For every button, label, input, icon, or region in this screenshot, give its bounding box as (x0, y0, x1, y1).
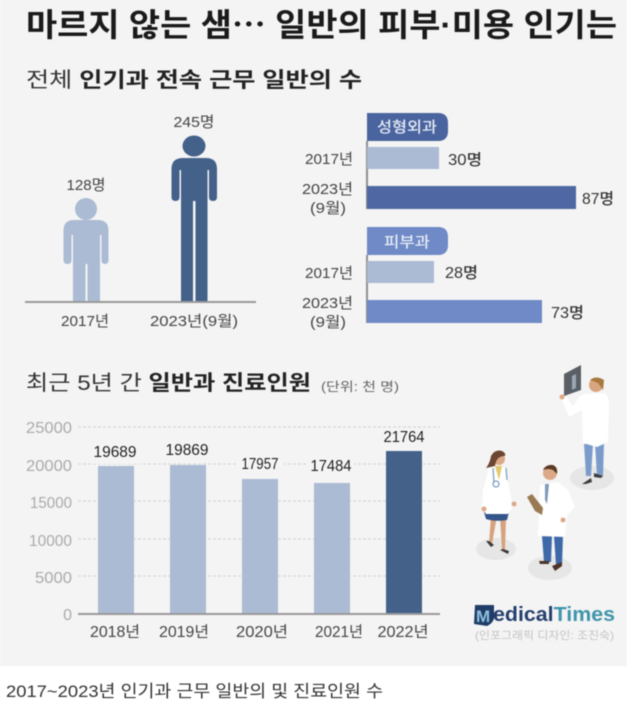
x axis labels: 2018년 (90, 623, 140, 641)
heading: recent five years: 최근 5년 간 일반과 진료인원 (26, 372, 311, 395)
label: September: (9월) (310, 200, 346, 217)
x axis labels: 2020년 (236, 623, 288, 641)
label: 245: 245명 (174, 114, 214, 131)
value: 73: 73명 (551, 304, 584, 322)
male doctor (527, 465, 575, 580)
x axis labels (90, 623, 428, 641)
value labels: 19689 (94, 444, 136, 461)
y axis labels: 15000 (30, 495, 72, 512)
bar: 2023 (367, 186, 576, 209)
label: year 2017: 2017년 (305, 151, 353, 168)
x axis labels: 2022년 (378, 623, 428, 641)
label: 2023: 2023년(9월) (150, 313, 238, 330)
y axis labels (26, 420, 72, 624)
tag: plastic surgery: 성형외과 (377, 119, 437, 136)
y axis labels: 0 (63, 607, 72, 624)
logo: Medical Times: M (476, 607, 490, 626)
label: 2017: 2017년 (61, 313, 109, 330)
y axis labels: 25000 (26, 420, 72, 437)
baseline (25, 301, 256, 303)
value labels: 17484 (310, 458, 352, 475)
bar: 2017 (367, 261, 434, 283)
title: 마르지 않는 샘⋯ 일반의 피부·미용 인기는 (26, 7, 617, 43)
heading: total doctors: 전체 인기과 전속 근무 일반의 수 (26, 69, 362, 92)
credit: (인포그래픽 디자인: 조진숙) (475, 629, 614, 642)
caption: 2017~2023년 인기과 근무 일반의 및 진료인원 수 (6, 682, 383, 701)
y axis labels: 20000 (26, 458, 72, 475)
label: 128: 128명 (66, 177, 106, 194)
value labels: 19869 (166, 442, 208, 459)
female doctor (476, 451, 516, 560)
y axis labels: 10000 (29, 533, 72, 550)
bars (98, 451, 422, 614)
illustration: doctors (476, 365, 614, 580)
axis line (78, 613, 440, 615)
icon: person 2017 (64, 198, 108, 302)
x axis labels: 2019년 (159, 623, 209, 641)
panel: dermatology bars (302, 227, 584, 331)
value: 30: 30명 (448, 151, 482, 169)
tag: dermatology: 피부과 (384, 234, 430, 251)
y axis labels: 5000 (35, 570, 72, 587)
value labels: 17957 (242, 456, 278, 473)
value: 87: 87명 (582, 190, 614, 208)
x axis labels: 2021년 (315, 623, 363, 641)
panel: pictogram comparison (25, 114, 256, 330)
label: September: (9월) (310, 314, 346, 331)
label: year 2023: 2023년 (302, 295, 353, 312)
bar: 2023 (367, 300, 542, 323)
label: year 2023: 2023년 (302, 181, 353, 198)
axis (366, 141, 368, 209)
value: 28: 28명 (445, 264, 478, 282)
bar chart: patients (26, 420, 440, 641)
panel: plastic surgery bars (302, 113, 614, 217)
unit note: (단위: 천 명) (321, 379, 399, 394)
logo: Medical Times: edicalTimes (493, 604, 615, 626)
value labels: 21764 (384, 429, 425, 446)
icon: person 2023 (172, 136, 217, 302)
tag: plastic surgery (367, 113, 448, 141)
bar: 2017 (367, 147, 439, 169)
value labels (92, 429, 425, 478)
doctor with x-ray (560, 365, 614, 490)
axis (366, 255, 368, 323)
label: year 2017: 2017년 (305, 265, 353, 282)
tag: dermatology (367, 227, 448, 255)
